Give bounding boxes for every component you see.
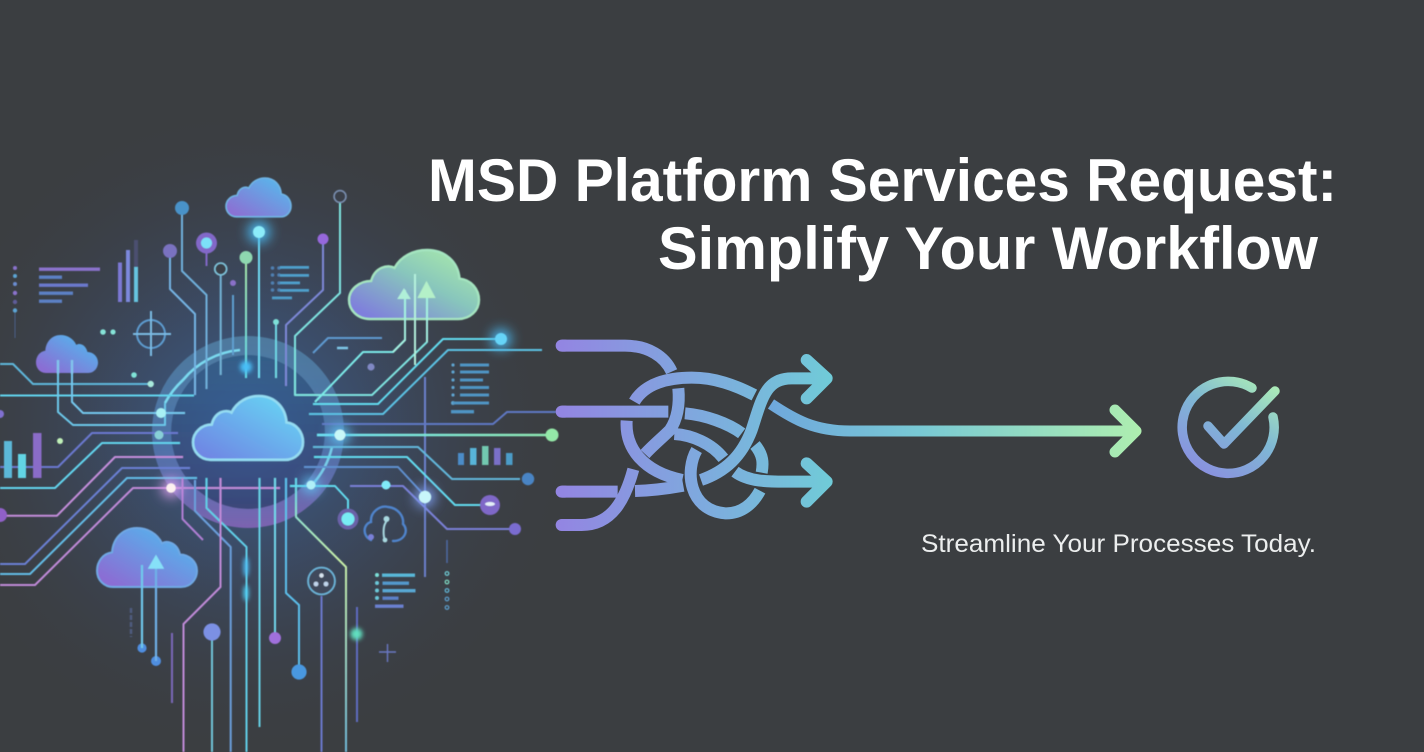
dotted column: lower (445, 540, 449, 609)
strand: inner arc (685, 413, 742, 433)
strand: right arc (755, 445, 763, 473)
cloud: center (193, 396, 303, 460)
strand: vertical diagonal (645, 388, 679, 454)
dotted column: under lower-left cloud (130, 608, 132, 637)
title: Simplify Your Workflow (658, 215, 1318, 282)
strand: upper arc (634, 378, 754, 402)
mini list: upper left (39, 268, 100, 303)
circuit lines: right traces (290, 412, 556, 529)
mini list: right (451, 363, 489, 413)
circuit lines: bottom verticals (172, 478, 357, 752)
tagline: Streamline Your Processes Today. (921, 530, 1316, 558)
arrowhead: upper output (807, 360, 827, 398)
mini bars: upper left (118, 240, 138, 302)
strand: top input (562, 346, 672, 372)
cloud: top (226, 178, 291, 217)
icon: crosshair (133, 311, 171, 356)
mini bars: left (4, 433, 42, 478)
icon: plus (379, 644, 396, 662)
background glow (0, 60, 640, 752)
circuit lines: left traces (0, 360, 280, 585)
strand: third input (562, 474, 618, 510)
circuit lines: top verticals (170, 203, 542, 577)
icon: network node (308, 568, 335, 594)
arrow: upper output (701, 378, 827, 480)
cloud: left (36, 335, 98, 374)
mini bars: right (458, 446, 512, 465)
central glowing ring (152, 336, 344, 528)
icon: outline cloud nodes (365, 507, 406, 542)
icon: check circle (1182, 381, 1275, 473)
cloud: upper right with arrows (349, 250, 479, 365)
cloud: lower left with arrows (97, 528, 197, 661)
strand: left loop (627, 421, 682, 480)
dotted column: upper left (13, 266, 17, 338)
strand: lower arc (674, 434, 723, 458)
strand: second input (562, 394, 668, 430)
node dots (0, 190, 558, 680)
mini list: top center (271, 266, 309, 299)
title: MSD Platform Services Request: (428, 147, 1337, 214)
arrowhead: lower output (807, 463, 827, 502)
mini list: lower (375, 573, 416, 608)
arrow: lower output (735, 472, 827, 482)
diagram: tangled workflow knot (562, 346, 827, 525)
strand: fourth input (562, 469, 633, 525)
title (428, 147, 1337, 282)
arrow: long gradient arrow (771, 404, 1136, 452)
strand: small loop (691, 450, 760, 513)
illustration: cloud circuit network (0, 178, 558, 752)
strand: third input continuation (635, 486, 683, 491)
